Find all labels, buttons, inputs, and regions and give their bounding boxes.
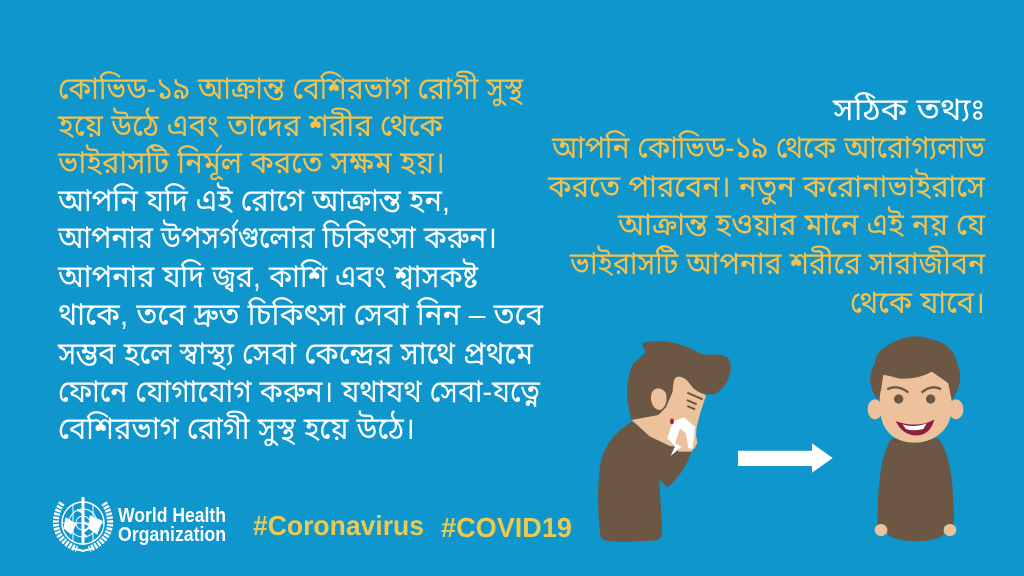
ears [868, 399, 882, 419]
hand [677, 428, 697, 452]
left text block [57, 71, 543, 446]
right text block: করতে পারবেন। নতুন করোনাভাইরাসে [547, 169, 986, 205]
hair [870, 336, 960, 400]
body [598, 422, 692, 542]
highlighted recovery statement: কোভিড-১৯ আক্রান্ত বেশিরভাগ রোগী সুস্থ [58, 71, 523, 106]
ear [651, 388, 666, 410]
arrow [738, 443, 833, 473]
eyes [894, 394, 903, 404]
treatment advice: ফোনে যোগাযোগ করুন। যথাযথ সেবা-যত্নে [58, 374, 541, 409]
WHO logo: Organization [118, 524, 226, 546]
right text block: আক্রান্ত হওয়ার মানে এই নয় যে [617, 207, 986, 242]
hashtag: Coronavirus: #Coronavirus [253, 510, 424, 541]
treatment advice [57, 183, 543, 446]
right text block: আপনি কোভিড-১৯ থেকে আরোগ্যলাভ [551, 130, 986, 165]
mouth [896, 419, 934, 435]
eye and brow [687, 393, 703, 409]
WHO logo [56, 497, 226, 551]
emblem [56, 497, 110, 551]
illustration: sick man sneezing into tissue [598, 341, 731, 542]
right text block: থেকে যাবে। [850, 285, 985, 320]
face and neck [632, 376, 706, 448]
highlighted recovery statement: হয়ে উঠে এবং তাদের শরীর থেকে [57, 107, 444, 143]
right text block [547, 130, 986, 320]
tissue [667, 417, 695, 456]
hair [627, 341, 731, 420]
treatment advice: সম্ভব হলে স্বাস্থ্য সেবা কেন্দ্রের সাথে প্রথমে [57, 336, 534, 371]
treatment advice: আপনার উপসর্গগুলোর চিকিৎসা করুন। [57, 219, 497, 255]
body [877, 438, 954, 541]
treatment advice: থাকে, তবে দ্রুত চিকিৎসা সেবা নিন – তবে [58, 297, 543, 332]
hands [875, 524, 887, 536]
highlighted recovery statement [57, 71, 523, 181]
face [880, 370, 952, 443]
hashtag: COVID19: #COVID19 [441, 512, 572, 543]
mouth [670, 418, 674, 424]
highlighted recovery statement: ভাইরাসটি নির্মূল করতে সক্ষম হয়। [57, 144, 445, 181]
eyebrows [887, 387, 941, 393]
right text block: ভাইরাসটি আপনার শরীরে সারাজীবন [569, 246, 985, 281]
heading: correct information: সঠিক তথ্যঃ [832, 92, 985, 127]
illustration: recovered smiling man [868, 336, 963, 541]
wordmark: World Health [118, 505, 226, 527]
treatment advice: আপনার যদি জ্বর, কাশি এবং শ্বাসকষ্ট [57, 259, 479, 294]
treatment advice: আপনি যদি এই রোগে আক্রান্ত হন, [57, 183, 450, 218]
treatment advice: বেশিরভাগ রোগী সুস্থ হয়ে উঠে। [58, 410, 415, 446]
teeth [903, 423, 927, 430]
